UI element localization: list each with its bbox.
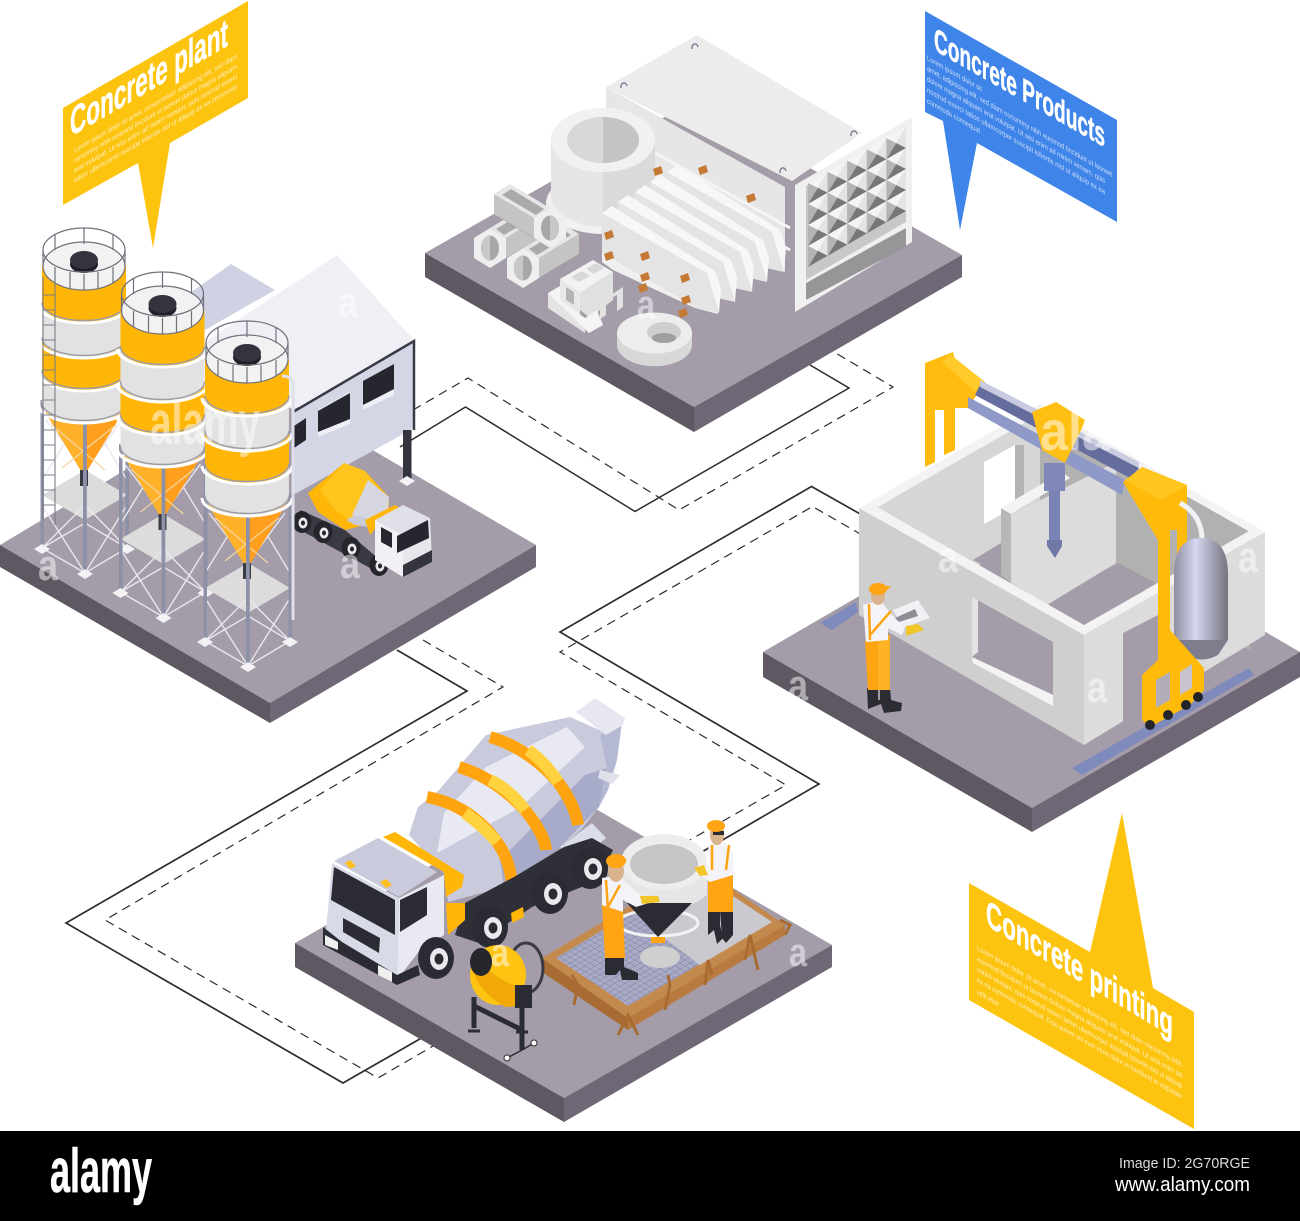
footer bar [0, 1131, 1300, 1221]
body text: amet, adipiscing elit, sed diam nonummy nibh euismod tincidunt ut laoreet [927, 64, 1113, 179]
silo 1 with ladder [34, 228, 135, 579]
connector: plant to pouring dashed [105, 640, 503, 1078]
heading: concrete printing: Concrete printing [986, 892, 1173, 1045]
plant building [180, 255, 415, 495]
watermark letters: a [340, 539, 360, 588]
watermark letter: a [637, 283, 656, 327]
large slab stack [606, 35, 862, 272]
watermarks: a [1238, 533, 1258, 582]
connector: plant to pouring solid [66, 650, 467, 1083]
silo 3 [197, 321, 298, 672]
body text: erat volutpat. Ut wisi enim ad minim veniam, quis nostrud exerci [74, 72, 237, 175]
website: www.alamy.com [1114, 1174, 1250, 1196]
body text: Lorem ipsum dolor sit amet, consectetuer adipiscing elit, sed diam [74, 52, 237, 155]
platform [763, 496, 1300, 832]
flat ring [617, 312, 692, 366]
worker 1 [602, 854, 660, 980]
portable cement mixer [468, 943, 543, 1061]
watermarks: a [789, 931, 808, 975]
hollow hex tubes [474, 184, 579, 288]
body text: Lorem ipsum dolor sit amet, consectetuer adipiscing elit, sed diam nonummy nibh [977, 944, 1182, 1069]
heading: concrete products: Concrete Products [934, 20, 1105, 155]
watermarks: a [1087, 663, 1107, 712]
platform [0, 387, 536, 723]
body text: nonummy nibh euismod tincidunt ut laoreet dolore magna aliquam [74, 62, 237, 165]
printed house walls [859, 404, 1265, 745]
body text: Lorem ipsum dolor sit [927, 54, 983, 94]
foundation frame [542, 865, 790, 1035]
watermarks [788, 399, 1258, 712]
callout: concrete plant [63, 1, 248, 248]
watermarks: a [938, 533, 958, 582]
watermark letters: a [338, 278, 358, 327]
large mixer truck [323, 698, 625, 985]
platform [295, 790, 832, 1122]
body text: dolore magna aliquam erat volutpat. Ut wisi enim ad minim veniam, quis [927, 75, 1105, 185]
worker 2 [694, 820, 733, 944]
footer logo: alamy [50, 1137, 152, 1206]
watermarks: a [491, 931, 510, 975]
panel: concrete printing [763, 352, 1300, 832]
body text: euismod tincidunt ut laoreet dolore magna aliquam erat volutpat. Ut wisi enim ad [977, 955, 1182, 1080]
body text: minim veniam, quis nostrud exerci tation ullamcorper suscipit lobortis nisl ut aliquip [977, 965, 1182, 1090]
hollow block [548, 260, 623, 333]
panel: pouring on site [295, 698, 832, 1122]
body text: tation ullamcorper suscipit lobortis nisl ut aliquip ex ea commodo [74, 82, 237, 185]
watermark letters: a [38, 541, 58, 590]
panel: concrete plant [0, 228, 536, 723]
body text: nostrud exerci tation ullamcorper suscipit lobortis nisl ut aliquip ex ea [927, 86, 1105, 196]
connector: plant to products solid [400, 365, 849, 512]
body text: commodo consequat [927, 97, 981, 136]
panel: concrete products [425, 35, 962, 432]
watermarks: ala [1040, 399, 1111, 462]
silo 2 [112, 272, 214, 623]
waffle wall panel [795, 117, 912, 312]
body text: velit esse [977, 988, 999, 1009]
hopper bucket [618, 834, 707, 968]
discharge pipe [282, 376, 293, 620]
watermarks: a [788, 661, 808, 710]
front rail [1072, 668, 1254, 775]
connector: products to printing solid [560, 486, 862, 860]
concrete ring pipe [546, 108, 660, 234]
watermark letters [38, 278, 360, 590]
body text: ex ea commodo consequat. Duis autem vel eum iriure dolor in hendrerit in vulputate [977, 976, 1182, 1101]
watermark: alamy [150, 389, 260, 458]
rail left [820, 602, 858, 630]
gantry printer [925, 352, 1228, 730]
watermarks [491, 931, 808, 975]
connector: products to printing dashed [560, 506, 862, 860]
mixer truck small [292, 463, 432, 577]
worker with plans [863, 583, 930, 713]
callout: concrete printing [969, 813, 1194, 1129]
platform [425, 101, 962, 432]
precast piles [602, 165, 786, 318]
image id: Image ID: 2G70RGE [1119, 1155, 1250, 1172]
connector: plant to products dashed [413, 352, 893, 510]
callout: concrete products [925, 11, 1117, 230]
